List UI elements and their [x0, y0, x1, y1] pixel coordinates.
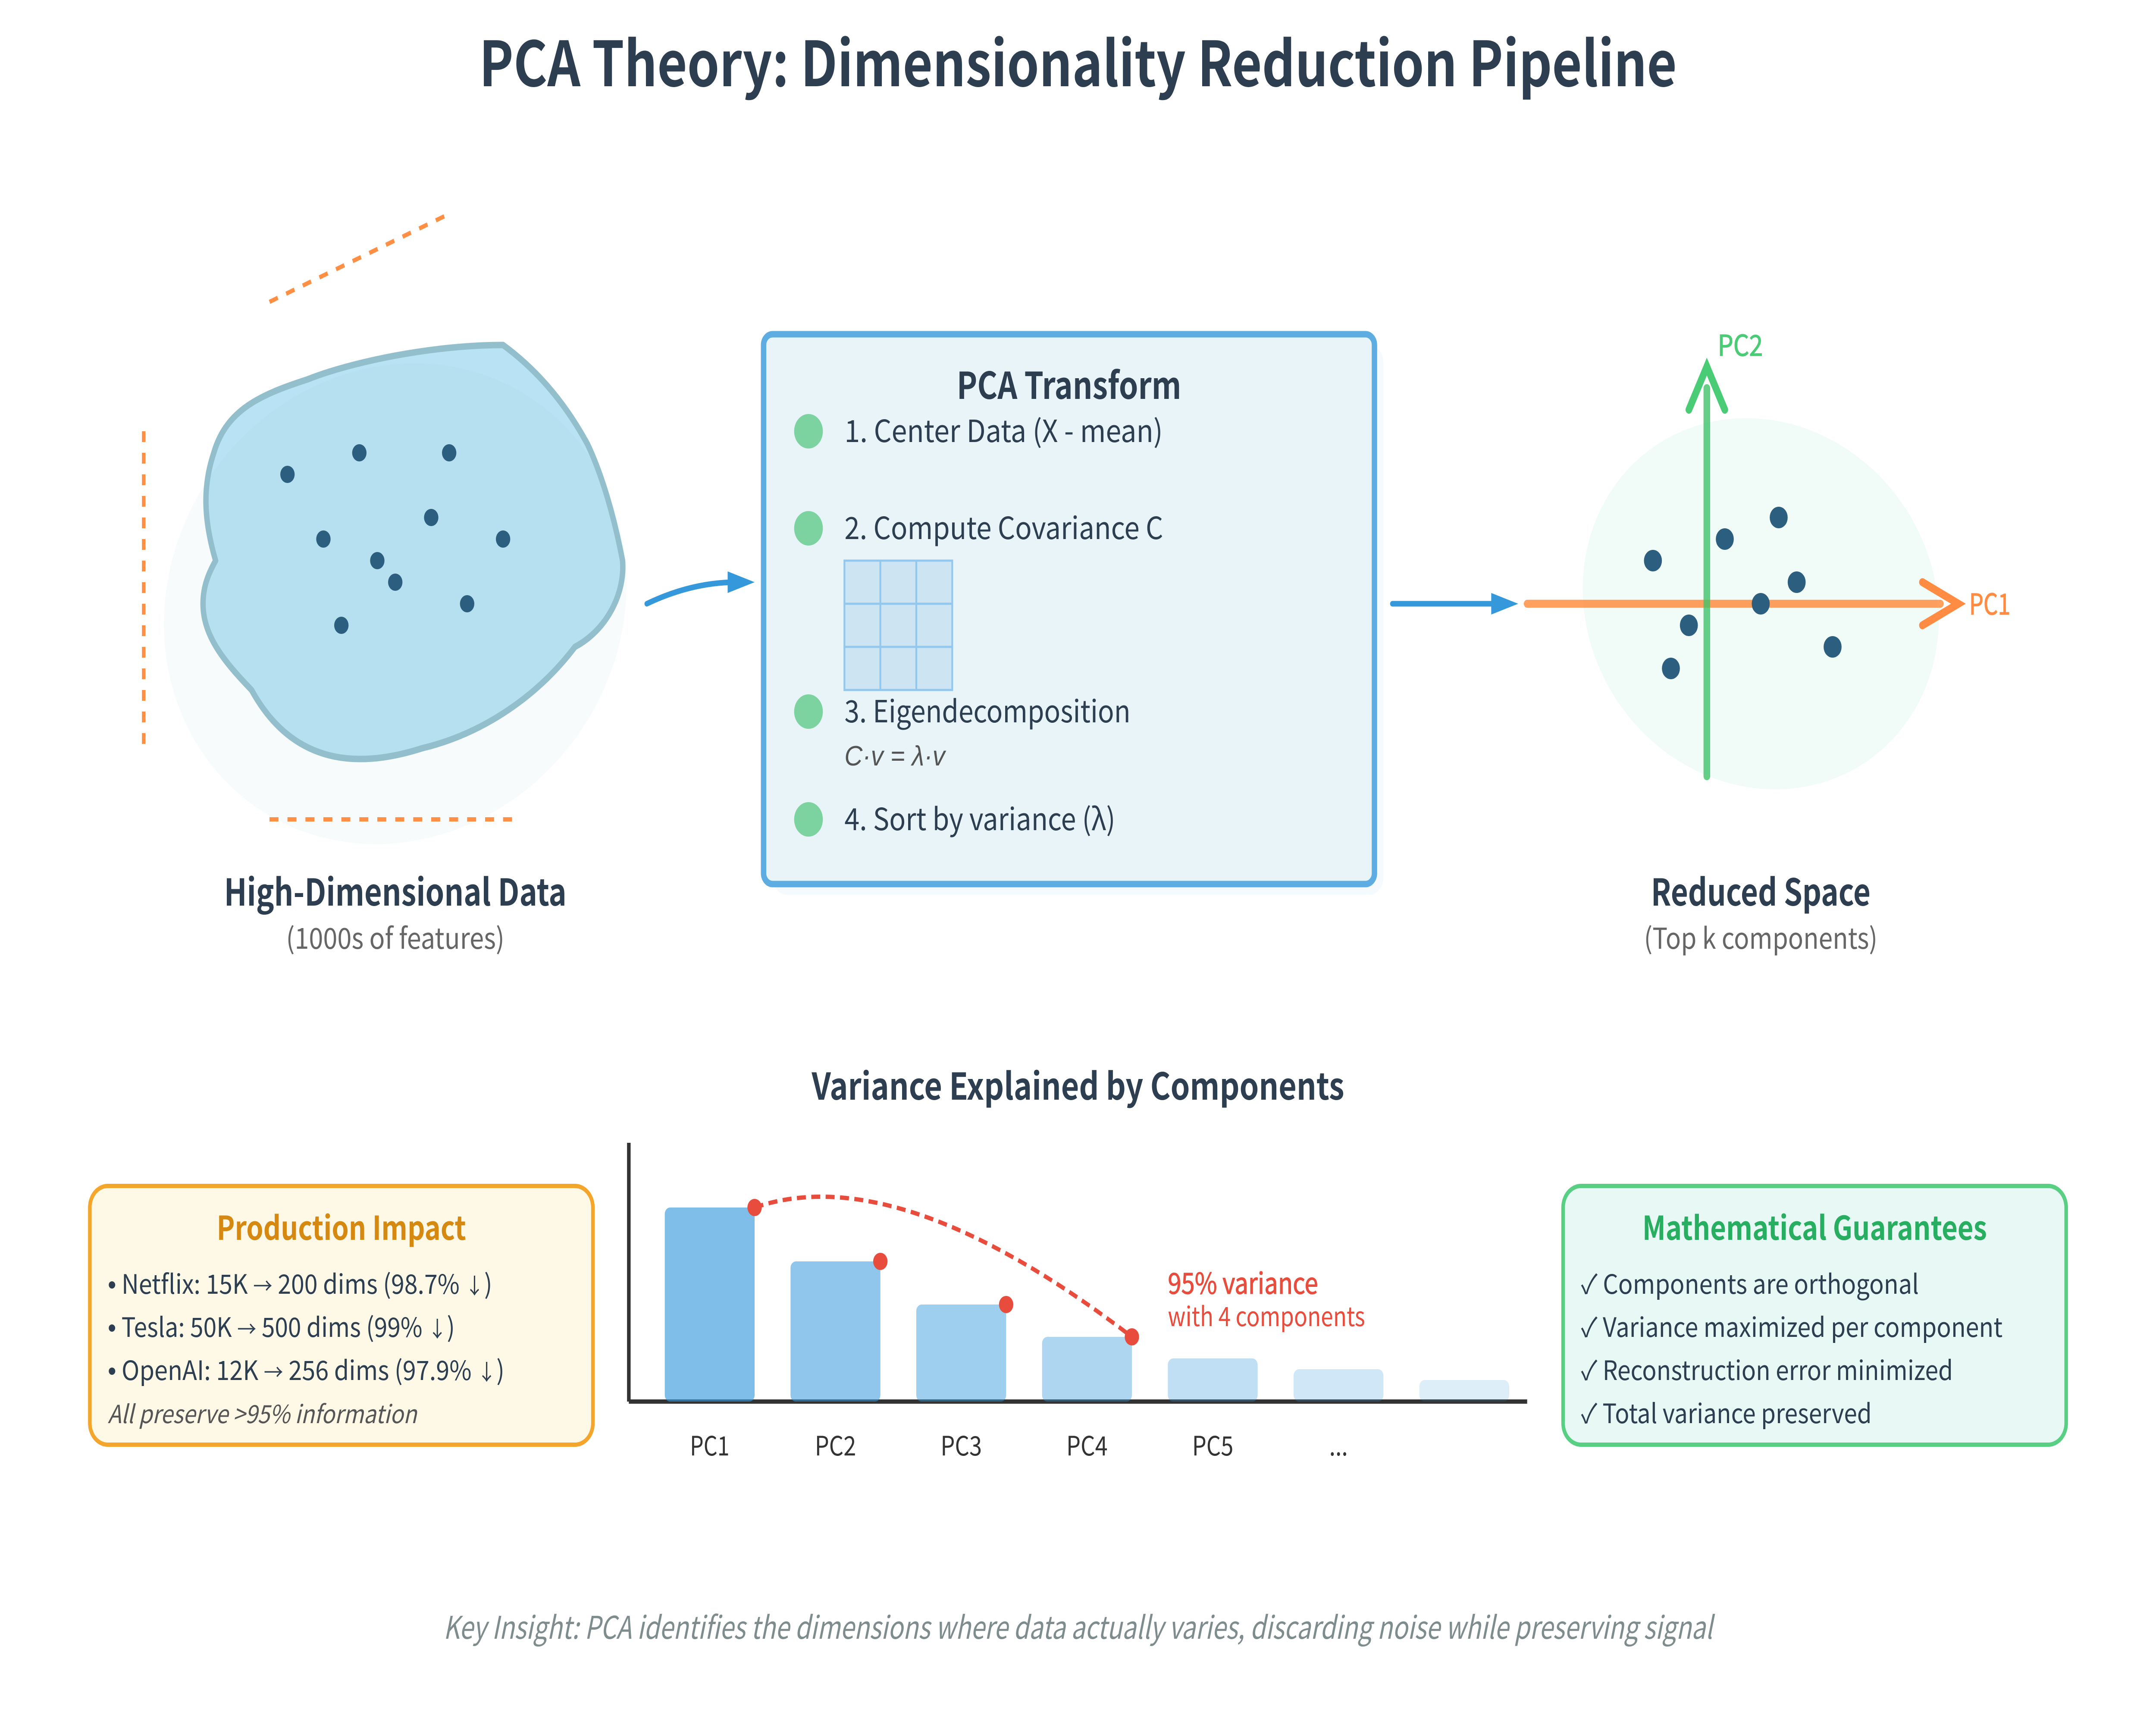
panel box	[764, 334, 1375, 884]
guarantees list: ✓ Reconstruction error minimized	[1581, 1349, 1953, 1388]
sublabel: top k: (Top k components)	[1644, 915, 1877, 957]
panel: high-dimensional data	[142, 214, 626, 954]
title: PCA Theory: Dimensionality Reduction Pipeline	[479, 15, 1677, 104]
background ellipse	[119, 302, 672, 905]
label: high-dimensional data: High-Dimensional Data	[224, 862, 567, 916]
data points	[280, 444, 510, 634]
axis labels: PC2	[815, 1425, 856, 1463]
guarantees list: ✓ Components are orthogonal	[1581, 1263, 1919, 1302]
chart heading: Variance Explained by Components	[812, 1057, 1344, 1110]
axes	[629, 1143, 1527, 1402]
background ellipse	[1548, 371, 1974, 837]
curve markers	[747, 1199, 1139, 1346]
impact list: • Tesla: 50K → 500 dims (99% ↓)	[108, 1306, 455, 1345]
step 3: 3. Eigendecomposition	[844, 687, 1131, 731]
key insight footer: Key Insight: PCA identifies the dimensions where data actually varies, discarding noise while preserving signal	[443, 1603, 1715, 1648]
panel: mathematical guarantees	[1563, 1186, 2066, 1445]
step 1: 1. Center Data (X - mean)	[844, 406, 1163, 451]
panel heading: PCA Transform	[957, 356, 1181, 410]
axis labels: PC1	[690, 1425, 730, 1463]
impact list: • OpenAI: 12K → 256 dims (97.9% ↓ )	[108, 1349, 505, 1388]
impact list: • Netflix: 15K → 200 dims (98.7% ↓)	[108, 1263, 492, 1302]
impact note: All preserve >95% information	[108, 1395, 418, 1430]
axis labels: PC4	[1066, 1425, 1108, 1463]
panel shadow	[773, 345, 1383, 895]
PC2 axis	[1689, 367, 1725, 776]
axis labels: ...	[1329, 1425, 1348, 1463]
guarantees list: ✓ Variance maximized per component	[1581, 1306, 2002, 1345]
guarantees list	[1581, 1263, 2002, 1431]
guarantees list: ✓ Total variance preserved	[1581, 1393, 1872, 1431]
callout: with 4 components: with 4 components	[1168, 1295, 1365, 1334]
sublabel: features: (1000s of features)	[286, 915, 505, 957]
panel: production impact	[90, 1186, 593, 1445]
arrow: data to transform	[647, 571, 755, 604]
arrow: transform to reduced space	[1392, 593, 1518, 615]
panel heading: Production Impact	[216, 1202, 466, 1250]
PC1 axis	[1527, 582, 1959, 625]
panel: PCA transform	[764, 334, 1383, 895]
panel heading: Mathematical Guarantees	[1642, 1202, 1987, 1250]
dashed dimension lines	[144, 216, 512, 819]
step 2: 2. Compute Covariance C	[844, 503, 1163, 548]
bars	[665, 1208, 1509, 1402]
axis labels: PC5	[1192, 1425, 1233, 1463]
step 4: 4. Sort by variance (λ)	[844, 794, 1116, 839]
label: reduced space: Reduced Space	[1651, 862, 1871, 916]
axis labels: PC3	[940, 1425, 982, 1463]
axis labels	[690, 1425, 1348, 1463]
projected points	[1644, 507, 1842, 679]
panel box	[90, 1186, 593, 1445]
PC1 label: PC1	[1969, 581, 2011, 623]
bar chart: variance explained	[629, 1143, 1527, 1463]
callout: 95% variance: 95% variance	[1168, 1260, 1318, 1302]
eigen equation: C·v = λ·v	[844, 740, 946, 772]
panel: reduced space	[1527, 322, 2010, 957]
data blob	[200, 342, 626, 762]
covariance matrix	[844, 561, 952, 690]
impact list	[108, 1263, 505, 1388]
PC2 label: PC2	[1717, 322, 1763, 364]
cumulative curve	[755, 1197, 1132, 1337]
panel box	[1563, 1186, 2066, 1445]
